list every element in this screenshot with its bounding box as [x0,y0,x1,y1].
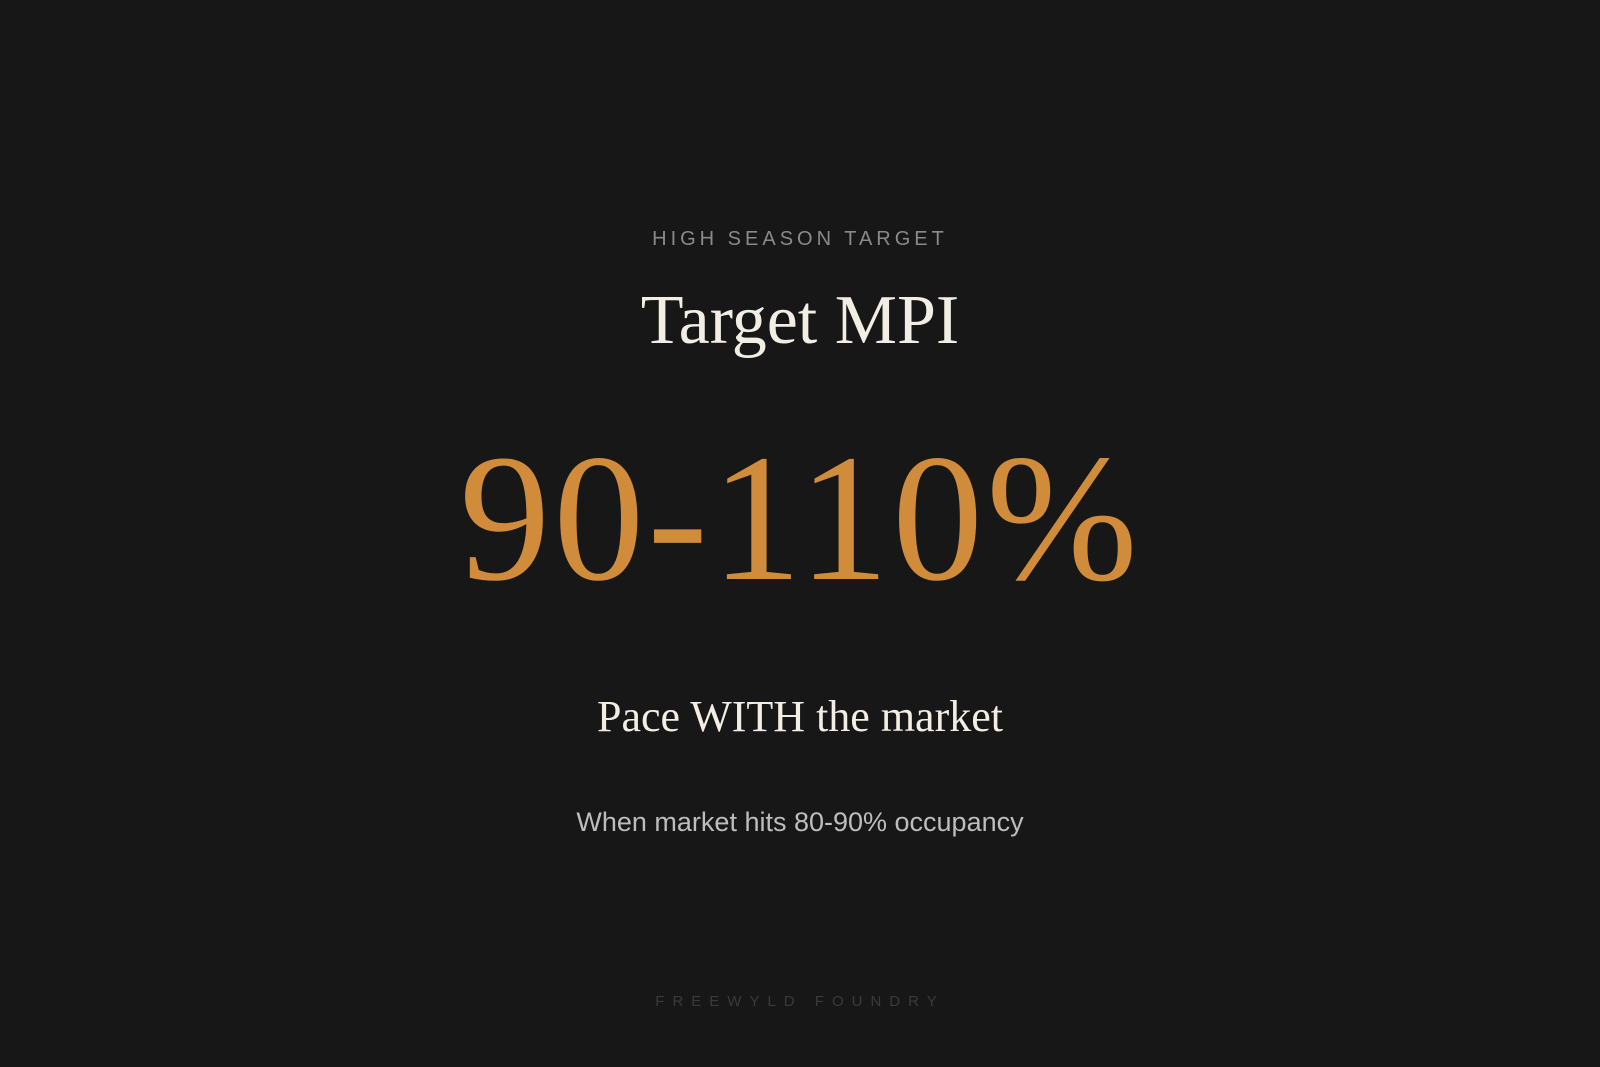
footer: brand: FREEWYLD FOUNDRY [655,993,945,1010]
heading: Target MPI: Target MPI [641,282,959,359]
eyebrow: high season target: HIGH SEASON TARGET [652,228,948,250]
text: occupancy condition: When market hits 80-90% occupancy [576,807,1024,837]
subheading: pace with the market: Pace WITH the market [597,692,1003,741]
big number: 90-110%: 90-110% [459,418,1141,619]
